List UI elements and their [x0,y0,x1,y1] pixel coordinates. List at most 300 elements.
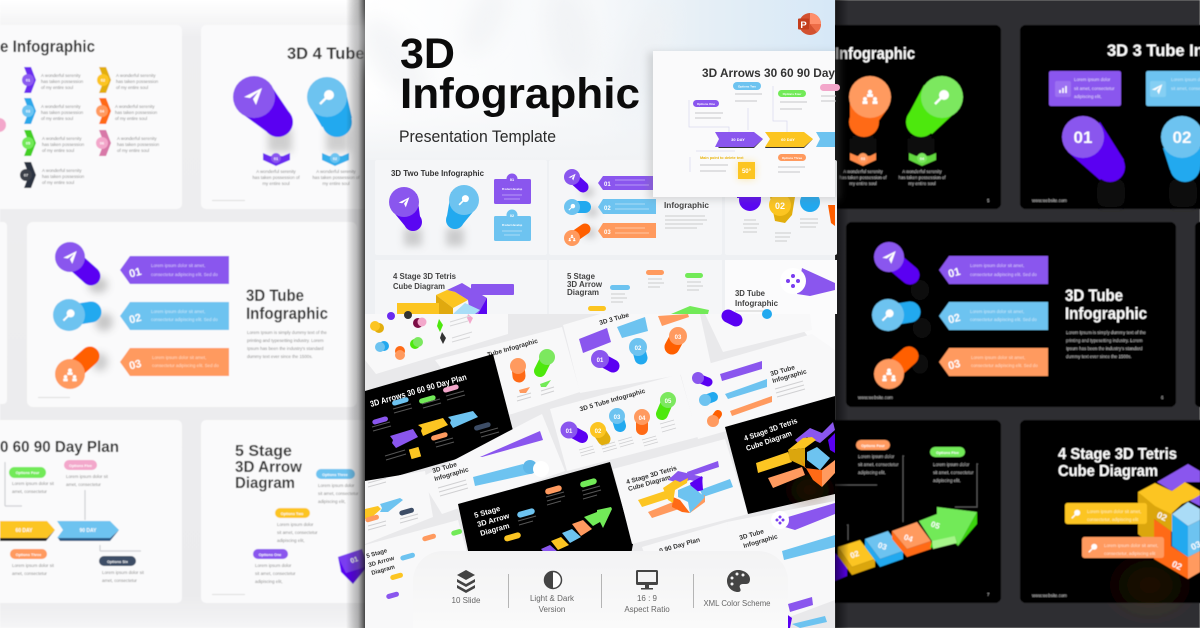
floating slide: 3D Arrows 30 60 90 Day: 3D Arrows 30 60 90 Day [702,66,835,80]
slide: infographic with seven badges: A wonderful serenity [115,104,155,109]
slide: dark 5 stage arrow: Lorem ipsum dolor [933,462,970,467]
panel: light slides background [0,0,459,628]
slide: infographic with seven badges: 07 [24,174,28,178]
slide: 30 60 90 Day Plan: amet, consectetur [66,482,101,487]
title: Infographic [400,70,640,118]
badge: yellow square [738,162,755,179]
text block: Lorem Ipsum is simply dummy text of the [1066,330,1146,335]
label: aspect ratio: 16 : 9 [637,594,658,603]
slide: dark tubes pair [820,25,1001,209]
label: aspect ratio: Aspect Ratio [624,605,670,614]
slide: 5 Stage 3D Arrow Diagram: adipiscing elit, [255,579,283,584]
tag 01: consectetur adipiscing elit. Sed do [151,272,218,277]
slide: dark 4 Stage Tetris: Cube Diagram [1058,463,1158,480]
slide: dark tubes pair: A wonderful serenity [902,169,943,174]
tag 02: 02 [128,312,143,327]
tag 03: Lorem ipsum dolor sit amet, [152,355,206,360]
tilted slide: 4 Stage Tetris: Cube Diagram [627,474,672,493]
slide: infographic with seven badges: of my entire soul [115,116,147,121]
slide: left stub [0,222,7,404]
badge: yellow square: 50° [742,169,752,175]
thumbnail: 3D Tube Infographic white: Infographic [735,299,779,308]
icon: layers [457,570,475,593]
icon: tube 02 [1161,116,1200,182]
tag 03: Lorem ipsum dolor sit amet, [971,355,1025,360]
slide: dark 3D 3 Tube: www.website.com [1032,198,1067,203]
tag: yellow: Lorem ipsum dolor sit amet, [1087,509,1141,514]
icon: purple tube [233,76,293,137]
tilted slide: 3D Tube bands: 3D Tube [432,461,458,475]
tilted slide: dark 5 Stage 3D Arrow [458,462,633,560]
slide: 3D 4 Tube Infographic: 3D 4 Tube Infographic [287,44,459,63]
banner: 02 [322,153,349,166]
arrow: 90 day: 90 DAY [79,528,97,534]
thumbnail: tube tags: 02 [604,206,611,212]
decorative leaf shadows [348,0,682,122]
tilted slide: top right [705,309,812,352]
tag 03: 03 [128,358,143,373]
slide: dark tubes pair: has taken possession of [898,175,946,180]
arrow: 60 day: 60 DAY [781,137,795,142]
icon: green tube [906,76,963,137]
thumbnail: 4 Stage 3D Tetris [375,260,547,314]
icon: tube 2 [53,299,91,331]
icon: tetris cube: 02 [1170,559,1184,572]
tilted slide: dark 5 Stage 3D Arrow: 5 Stage [473,504,501,520]
tilted slide: 3D Tube tags: Infographic [772,368,808,385]
icon: tube 3 [55,356,90,389]
banner: 01 [263,153,290,166]
slide: 5 Stage 3D Arrow Diagram: sit amet, consectetur [277,530,318,535]
icon: tetris cube [756,422,835,488]
heading: 3D Tube [246,286,304,305]
slide: infographic with seven badges: of my entire soul [41,85,73,90]
slide: infographic with seven badges: of my entire soul [116,85,148,90]
slide: dark 5 stage arrow: sit amet, consectetur [933,470,974,475]
icon: tetris cube [1138,464,1200,579]
text block: Ipsum has been the industry's standard [1066,346,1143,351]
slide: 30 60 90 Day Plan: Lorem ipsum dolor sit [102,570,145,575]
icon: tube 2 [872,299,910,331]
slide: infographic with seven badges: A wonderful serenity [42,168,82,173]
tilted slide: 4 Stage Tetris: 4 Stage 3D Tetris [626,465,678,486]
subtitle: Presentation Template [399,127,556,146]
tilted slide: 3D 3 Tube: 03 [675,335,682,341]
tag 03: consectetur adipiscing elit. Sed do [152,363,219,368]
arrow: 60 day [0,521,55,541]
heading: 3D Tube [1065,286,1123,305]
tag 01 [120,256,229,284]
banner: 01: 01 [274,157,278,161]
slide: 5 Stage 3D Arrow Diagram: Diagram [235,475,295,492]
tilted slide: 90 Day Plan: 0 90 Day Plan [659,537,701,555]
box: purple: adipiscing elit, [1074,94,1102,99]
pill: options: Options Five [936,451,959,455]
tag: orange: Lorem ipsum dolor sit amet, [1104,543,1158,548]
block: purple 01 [338,549,368,584]
thumbnail: tube tags: Infographic [664,201,710,210]
slide: dark 4 Stage Tetris: 4 Stage 3D Tetris [1058,446,1177,463]
icon: blue tube [307,77,352,137]
floating slide: 3D Arrows 30 60 90 Day: Main point to delete text [700,156,744,160]
pill: option three [10,549,47,559]
slide: dark tubes pair: 5 [987,198,990,203]
block: 02 yellow: 02 [849,549,861,560]
arrow: 30 day: 30 DAY [731,137,745,142]
slide: 5 Stage 3D Arrow Diagram: Lorem ipsum dolor [318,483,355,488]
label: 10 Slide: 10 Slide [452,596,481,605]
thumbnail: tube tags: 03 [604,230,611,236]
tilted slide: 4 Stage Tetris [613,439,748,544]
pill: options [856,440,890,450]
slide: 3D 4 Tube Infographic: A wonderful serenity [256,169,297,174]
tag 01 [939,256,1048,284]
tilted slide: 3D 5 Tube Infographic: 03 [614,415,621,421]
thumbnail: 3D Tube Infographic white [725,260,837,314]
tilted slide: 3D Tube bands: Infographic [434,466,470,483]
slide: infographic with seven badges: of my entire soul [42,180,74,185]
box: blue [494,210,531,241]
tag 03: consectetur adipiscing elit. Sed do [971,363,1038,368]
box: purple: Lorem ipsum dolor [1074,77,1111,82]
icon: tetris cube: 02 [1155,510,1169,523]
title [400,30,640,118]
tilted slide: 5 Stage lower left: 3D Arrow [368,556,395,569]
tag 01: consectetur adipiscing elit. Sed do [970,272,1037,277]
box: purple: sit amet, consectetur [1074,86,1115,91]
slide: dark stub [1195,222,1200,407]
text block: printing and typesetting industry. Lorem [1066,338,1143,343]
text block: dummy text ever since the 1500s. [247,354,313,359]
heading: Infographic [246,304,328,323]
slide: 3D 4 Tube Infographic [201,25,459,209]
block: 04 orange: 04 [903,533,915,544]
tilted slide: 3D 5 Tube Infographic: 02 [595,429,602,435]
tilted slide: 3D Tube lower right [727,501,835,628]
tilted slide: 3D Tube lower right: 3D Tube [739,528,765,542]
pill: options one: Options One [259,553,281,557]
banner: 02: 02 [333,157,337,161]
tilted slide: dark 3D Arrows 30 60 90 Day Plan: 3D Arrows 30 60 90 Day Plan [369,372,468,409]
slide: infographic with seven badges: A wonderful serenity [116,73,156,78]
thumbnail: 4 Stage 3D Tetris: Cube Diagram [393,282,445,291]
tag 01: Lorem ipsum dolor sit amet, [151,263,205,268]
slide: 5 Stage 3D Arrow Diagram: sit amet, consectetur [318,491,359,496]
pill: options: Options Four [861,444,885,448]
thumbnail: 3D Two Tube Infographic [375,160,547,255]
arrow: 60 day: 60 DAY [15,528,33,534]
tilted slide: 3D 3 Tube: 3D 3 Tube [599,312,630,327]
pill: options two: Options Two [281,512,304,516]
slide: 30 60 90 Day Plan: Lorem ipsum dolor sit [12,563,55,568]
slide: 30 60 90 Day Plan: Lorem ipsum dolor sit [12,481,55,486]
thumbnail: 3D Two Tube Infographic: 3D Two Tube Infographic [391,169,485,178]
slide: 5 Stage 3D Arrow Diagram: 5 Stage [235,443,292,460]
pill: option five [64,460,97,470]
tag 02: Lorem ipsum dolor sit amet, [151,309,205,314]
tilted slide: two tubes: Tube Infographic [487,338,539,359]
slide: infographic with seven badges: has taken possession [117,142,160,147]
pill: option four [778,90,806,97]
banner: orange: 03 [861,157,865,161]
box: purple: 01 [510,178,514,182]
slide: 5 Stage 3D Arrow Diagram [201,420,371,603]
arrow: 30 day [715,132,763,148]
slide: 30 60 90 Day Plan: amet, consectetur [12,489,47,494]
slide: infographic with seven badges: of my entire soul [42,148,74,153]
pill: options one [253,549,288,559]
slide: dark tubes pair: Infographic [835,44,915,63]
slide: 30 60 90 Day Plan: amet, consectetur [12,571,47,576]
pill: option one [693,100,719,107]
icon: half circle [544,572,562,588]
slide: dark 5 stage arrow: sit amet, consectetur [858,462,899,467]
slide: 30 60 90 Day Plan: Lorem ipsum dolor sit [66,474,109,479]
block: purple 01: 01 [350,556,359,565]
pill: options two [275,508,310,518]
block: 05 green arrow: 05 [930,520,942,531]
slide: infographic with seven badges: of my entire soul [117,148,149,153]
pill: option one: Options One [697,102,715,106]
tilted slide: 5 Stage lower left [365,520,480,628]
pill: options [930,447,965,457]
slide: 30 60 90 Day Plan: amet, consectetur [102,578,137,583]
slide: 5 Stage 3D Arrow Diagram: adipiscing elit, [318,499,346,504]
floating slide: 3D Arrows 30 60 90 Day [648,51,840,200]
tilted slide: two tubes [435,327,580,420]
pill: option three: Options Three [782,156,802,160]
tilted slide: 3D Tube lower right: Infographic [743,533,779,550]
icon: tube 1 [55,242,91,276]
block: 02 yellow [838,540,875,575]
slide: infographic with seven badges: A wonderful serenity [41,73,81,78]
slide: dark 3D Tube Infographic: www.website.com [858,395,893,400]
tilted slide: dark 4 Stage Tetris: Cube Diagram [745,429,793,453]
icon: blue tube [446,185,479,229]
tilted slide: left arrows [365,471,433,544]
panel: dark slides background [820,0,1200,628]
text block: printing and typesetting industry. Lorem [247,338,324,343]
slide: 30 60 90 Day Plan [0,420,182,603]
icon: tube 01 [1062,116,1125,182]
slide: 5 Stage 3D Arrow Diagram: 3D Arrow [235,459,303,476]
label: XML Color Scheme: XML Color Scheme [704,599,771,608]
tag 03: 03 [947,358,962,373]
label: Light and Dark Version: Version [539,605,565,614]
pill: option two [733,82,761,90]
banner: green: 04 [920,157,925,161]
slide: dark tubes pair: my entire soul [908,181,936,186]
slide: infographic with seven badges: has taken possession [42,142,85,147]
pill: options three: Options Three [322,473,348,477]
slide: dark 3D 3 Tube [1020,25,1200,209]
pill: option four: Options Four [783,92,802,96]
tag: orange: consectetur, adipiscing elit [1104,551,1156,556]
slide: infographic with seven badges: A wonderful serenity [117,136,157,141]
tilted slide: 3D Tube tags [680,334,835,439]
slide: dark tubes pair: A wonderful serenity [843,169,884,174]
tag 02: consectetur adipiscing elit. Sed do [970,317,1037,322]
slide: dark 5 stage arrow: adipiscing elit, [858,470,886,475]
box: blue: Product develop [502,223,523,227]
text block: dummy text ever since the 1500s. [1066,354,1132,359]
thumbnail: 4 Stage 3D Tetris: 4 Stage 3D Tetris [393,272,457,281]
tilted slide: dark 4 Stage Tetris [725,396,840,514]
tag 02: Lorem ipsum dolor sit amet, [970,309,1024,314]
tilted slide: 90 Day Plan [642,522,740,600]
pill: option five [820,84,840,91]
slide: dark 5 stage arrow: Lorem ipsum dolor [858,454,895,459]
heading: Infographic [1065,304,1147,323]
pill: option six: Options Six [107,560,129,564]
tilted slide: ring [365,311,508,374]
arrow: 90 day [816,132,835,147]
slide: 3D Tube Infographic light [27,222,357,407]
text block [1066,330,1146,359]
tag 02 [939,302,1048,330]
tag 03 [939,348,1048,376]
slide: 5 Stage 3D Arrow Diagram: Lorem ipsum dolor [255,563,292,568]
tilted slide: 3D 5 Tube Infographic: 01 [566,429,573,435]
pill: option three [778,154,806,161]
card: features [413,551,788,628]
icon: tube 3 [874,356,909,389]
block: 05 green arrow [919,507,977,549]
icon: PowerPoint logo: P [800,20,807,31]
slide: infographic with seven badges: 01 [26,78,30,82]
thumbnail: 5 Stage 3D Arrow: Diagram [567,288,599,297]
icon: tetris cube [638,461,733,518]
text block: Ipsum has been the industry's standard [247,346,324,351]
tag 01: 01 [947,266,962,281]
slide: 5 Stage 3D Arrow Diagram: Lorem ipsum dolor [277,522,314,527]
heading [1065,286,1147,323]
slide: dark 3D Tube Infographic: 6 [1161,395,1164,400]
pill: option four [9,467,46,478]
slide: infographic with seven badges: 02 [101,78,105,82]
tag 01: Lorem ipsum dolor sit amet, [970,263,1024,268]
pill: option three: Options Three [16,553,41,557]
slide: dark 5 stage arrow [820,420,1001,603]
icon: monitor [636,570,658,590]
pill: option six [99,556,136,566]
pill: option four: Options Four [16,471,40,475]
slide: infographic with seven badges: 04 [100,110,105,114]
slide: 3D 4 Tube Infographic: my entire soul [322,181,350,186]
tilted slide: 3D Tube tags: 3D Tube [770,364,796,378]
slide: 30 60 90 Day Plan: 0 60 90 Day Plan [0,439,119,456]
slide: dark 5 stage arrow: 7 [987,592,990,597]
title: 3D [400,30,455,78]
slide: 3D 4 Tube Infographic: has taken possession of [252,175,300,180]
icon: tube 01: 01 [1074,128,1092,147]
slide: infographic with seven badges: A wonderful serenity [42,136,82,141]
tilted slide: dark 5 Stage 3D Arrow: Diagram [479,521,511,538]
box: blue: 02 [510,214,514,218]
icon: palette [727,570,750,592]
pill: option two: Options Two [738,84,756,88]
tilted slide: 5 Stage lower left: Diagram [371,565,396,577]
slide: infographic with seven badges: of my entire soul [41,116,73,121]
box: purple [494,174,531,204]
slide: dark 4 Stage Tetris: www.website.com [1032,593,1067,598]
text block [247,330,327,359]
box: blue [1146,71,1200,106]
thumbnail: 3D Tube Infographic white: 3D Tube [735,289,766,298]
block: 01 purple [835,553,847,581]
slide: dark tubes pair: my entire soul [849,181,877,186]
tilted slide: dark 3D Arrows 30 60 90 Day Plan [365,354,516,484]
label: aspect ratio [624,594,670,614]
tag 03 [120,348,229,376]
tilted slide: 3D 5 Tube Infographic: 3D 5 Tube Infographic [579,388,646,413]
tag 01: 01 [128,266,143,281]
thumbnail: four tubes: 02 [775,201,785,211]
shadow: edge of central panel on left [346,0,366,628]
tilted slide: dark 4 Stage Tetris: 4 Stage 3D Tetris [743,416,799,443]
block: 04 orange [892,522,931,557]
slide: 5 Stage 3D Arrow Diagram: adipiscing elit, [277,538,305,543]
icon: tube 1 [874,242,910,275]
slide: 3D 4 Tube Infographic: my entire soul [262,181,290,186]
slide: 3D 4 Tube Infographic: A wonderful serenity [316,169,357,174]
slide: infographic with seven badges: 03 [26,110,30,114]
panel: central lower tilted slides [365,309,840,628]
tag: orange [1082,537,1164,558]
label: Light and Dark Version: Light & Dark [530,594,575,603]
slide: infographic with seven badges: has taken possession [42,174,85,179]
slide: dark 5 stage arrow: adipiscing elit, [933,478,961,483]
panel: central top [348,0,840,314]
thumbnail: 5 Stage 3D Arrow [549,260,722,314]
tilted slide: 3D 3 Tube: 02 [635,346,642,352]
box: purple [1049,71,1121,106]
tag: yellow: consectetur, adipiscing elit [1087,517,1139,522]
slide: infographic with seven badges: has taken possession [41,110,84,115]
tilted slide: 3D 3 Tube: 01 [597,358,604,364]
block: 03 blue: 03 [877,541,889,552]
block: 03 blue [865,531,903,567]
slide: 3D 4 Tube Infographic: has taken possession of [312,175,360,180]
slide: infographic with seven badges [0,25,182,209]
slide: infographic with seven badges: has taken possession [41,79,84,84]
tag 02 [120,302,229,330]
tag: yellow [1065,503,1147,524]
box: purple: Product develop [502,187,523,191]
label: Light and Dark Version [530,594,575,614]
slide: infographic with seven badges: 06 [100,142,104,146]
slide: infographic with seven badges: e Infographic [0,37,95,56]
banner: orange [850,153,876,166]
icon: orange tube [849,76,891,137]
slide: dark tubes pair: has taken possession of [839,175,887,180]
heading [246,286,328,323]
tilted slide: 3D 3 Tube [563,312,712,393]
tilted slide: 3D 5 Tube Infographic [550,374,698,471]
icon: purple tube [389,187,422,231]
tilted slide: 3D 5 Tube Infographic: 04 [639,416,646,422]
pill: options three [316,469,355,479]
slide: 5 Stage 3D Arrow Diagram: sit amet, consectetur [255,571,296,576]
shadow: edge of central panel on right [835,0,849,628]
tilted slide: 5 Stage lower left: 5 Stage [366,548,389,560]
tilted slide: dark 5 Stage 3D Arrow: 3D Arrow [476,511,510,529]
slide: infographic with seven badges: A wonderful serenity [41,104,81,109]
tag 02: consectetur adipiscing elit. Sed do [151,317,218,322]
thumbnail: 5 Stage 3D Arrow: 5 Stage [567,272,596,281]
slide: infographic with seven badges: has taken possession [116,79,159,84]
banner: green [909,153,936,166]
